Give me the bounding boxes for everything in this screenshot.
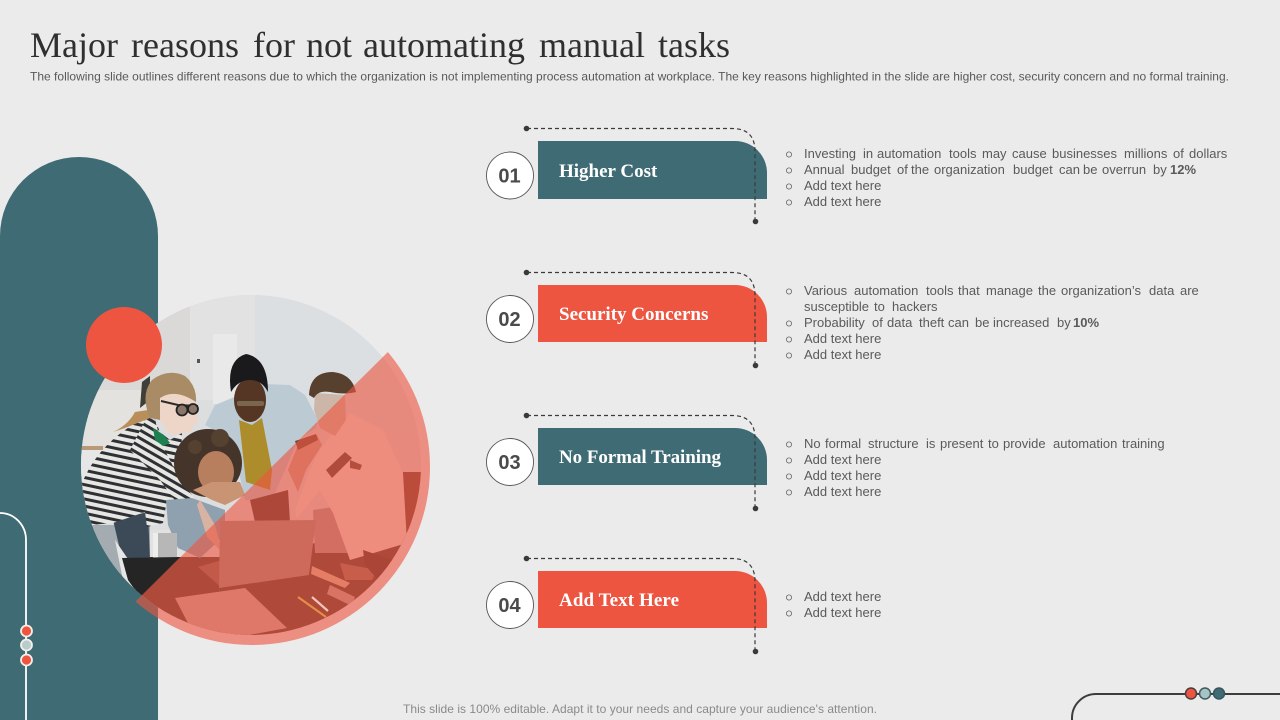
bullet list: are bbox=[1180, 283, 1199, 298]
bullet list: to bbox=[874, 299, 885, 314]
number badge 02 bbox=[486, 296, 534, 342]
bullet list: hackers bbox=[892, 299, 938, 314]
bullet list: the bbox=[1038, 283, 1056, 298]
tab: security concerns bbox=[538, 285, 767, 342]
bullet list: Add text here bbox=[804, 452, 881, 467]
bullet list: Add text here bbox=[804, 605, 881, 620]
number badge 03 bbox=[486, 438, 534, 486]
bullet list bbox=[786, 283, 1199, 362]
bullet list: present bbox=[940, 436, 984, 451]
tab: add text here: Add Text Here bbox=[559, 590, 679, 611]
row 2: security concerns bbox=[486, 270, 1199, 368]
bullet list: cause bbox=[1012, 146, 1047, 161]
bullet list: dollars bbox=[1189, 146, 1228, 161]
row 1: higher cost bbox=[486, 126, 1228, 224]
bullet list: organization bbox=[934, 162, 1005, 177]
bullet list: organization’s bbox=[1061, 283, 1141, 298]
tab: no formal training: No Formal Training bbox=[559, 447, 722, 468]
bullet list: theft bbox=[919, 315, 945, 330]
bullet list: automation bbox=[1053, 436, 1117, 451]
tab: higher cost: Higher Cost bbox=[559, 161, 658, 182]
bullet list: Various bbox=[804, 283, 848, 298]
footer note: This slide is 100% editable. Adapt it to your needs and capture your audience's attention. bbox=[403, 702, 877, 716]
laptop and notebook bbox=[175, 520, 393, 640]
bullet list: can bbox=[948, 315, 969, 330]
number badge 02: 02 bbox=[498, 309, 521, 331]
photo: team around a laptop bbox=[81, 295, 421, 635]
red circle accent bbox=[86, 307, 162, 383]
bullet list: Add text here bbox=[804, 331, 881, 346]
bullet list: budget bbox=[851, 162, 891, 177]
bullet list: that bbox=[958, 283, 980, 298]
title: manual bbox=[539, 25, 645, 65]
bullet list bbox=[786, 589, 881, 620]
bullet list: budget bbox=[1013, 162, 1053, 177]
tab: security concerns: Security Concerns bbox=[559, 304, 708, 325]
bullet list: Add text here bbox=[804, 589, 881, 604]
number badge 01: 01 bbox=[498, 166, 521, 188]
row 4: add text here bbox=[486, 556, 881, 654]
number badge 04 bbox=[486, 582, 534, 628]
man in denim shirt bbox=[205, 354, 318, 500]
bullet list: automation bbox=[854, 283, 918, 298]
title: tasks bbox=[658, 25, 730, 65]
bullet list: by bbox=[1057, 315, 1071, 330]
decorative white line with dots bbox=[0, 513, 32, 720]
bullet list: structure bbox=[868, 436, 919, 451]
bullet list: provide bbox=[1003, 436, 1046, 451]
bullet list: increased bbox=[993, 315, 1049, 330]
bullet list: tools bbox=[949, 146, 977, 161]
bullet list: of bbox=[1173, 146, 1184, 161]
bullet list: training bbox=[1122, 436, 1165, 451]
panel: teal rounded column bbox=[0, 157, 158, 720]
bullet list: tools bbox=[926, 283, 954, 298]
dashed connector bbox=[524, 556, 758, 654]
title: automating bbox=[363, 25, 525, 65]
title: not bbox=[306, 25, 352, 65]
bullet list: Add text here bbox=[804, 194, 881, 209]
number badge 04: 04 bbox=[498, 595, 521, 617]
dashed connector bbox=[524, 413, 758, 511]
bullet list: automation bbox=[877, 146, 941, 161]
decorative corner line with dots bbox=[1072, 688, 1280, 720]
dashed connector bbox=[524, 126, 758, 224]
bullet list: data bbox=[887, 315, 913, 330]
subtitle description: The following slide outlines different reasons due to which the organization is not implementing process automation at workplace. The key reasons highlighted in the slide are higher cost, security concern and no formal training. bbox=[30, 70, 1229, 84]
bullet list: 10% bbox=[1073, 315, 1099, 330]
bullet list: by bbox=[1153, 162, 1167, 177]
bullet list: may bbox=[982, 146, 1007, 161]
bullet list: Add text here bbox=[804, 484, 881, 499]
bullet list: millions bbox=[1124, 146, 1168, 161]
number badge 03: 03 bbox=[498, 452, 521, 474]
man in orange jacket bbox=[250, 372, 423, 560]
overlay: translucent salmon segment bbox=[136, 352, 430, 645]
bullet list: Add text here bbox=[804, 347, 881, 362]
bullet list: Add text here bbox=[804, 468, 881, 483]
tab: higher cost bbox=[538, 141, 767, 199]
floor and table under the overlay bbox=[120, 522, 411, 635]
dashed connector bbox=[524, 270, 758, 368]
woman with curly hair bbox=[122, 429, 245, 597]
bullet list: overrun bbox=[1102, 162, 1146, 177]
pencils on the table bbox=[298, 597, 328, 617]
bullet list: Investing bbox=[804, 146, 856, 161]
bullet list: manage bbox=[986, 283, 1033, 298]
bullet list: be bbox=[975, 315, 989, 330]
bullet list: susceptible bbox=[804, 299, 869, 314]
bullet list: to bbox=[988, 436, 999, 451]
bullet list: is bbox=[926, 436, 936, 451]
title: reasons bbox=[131, 25, 239, 65]
bullet list: Probability bbox=[804, 315, 865, 330]
bullet list: of bbox=[872, 315, 883, 330]
bullet list: 12% bbox=[1170, 162, 1196, 177]
row 3: no formal training bbox=[486, 413, 1165, 511]
bullet list: formal bbox=[825, 436, 861, 451]
bullet list: No bbox=[804, 436, 821, 451]
bullet list: data bbox=[1149, 283, 1175, 298]
bullet list: be bbox=[1083, 162, 1097, 177]
bullet list bbox=[786, 146, 1228, 209]
bullet list: businesses bbox=[1052, 146, 1118, 161]
bullet list bbox=[786, 436, 1165, 499]
bullet list: Annual bbox=[804, 162, 845, 177]
bullet list: of bbox=[897, 162, 908, 177]
bullet list: Add text here bbox=[804, 178, 881, 193]
tab: add text here bbox=[538, 571, 767, 628]
title: for bbox=[253, 25, 295, 65]
number badge 01 bbox=[486, 152, 534, 199]
bullet list: in bbox=[863, 146, 873, 161]
woman in striped sweater bbox=[82, 372, 199, 590]
bullet list: can bbox=[1059, 162, 1080, 177]
bullet list: the bbox=[911, 162, 929, 177]
title: Major bbox=[30, 25, 118, 65]
tab: no formal training bbox=[538, 428, 767, 485]
